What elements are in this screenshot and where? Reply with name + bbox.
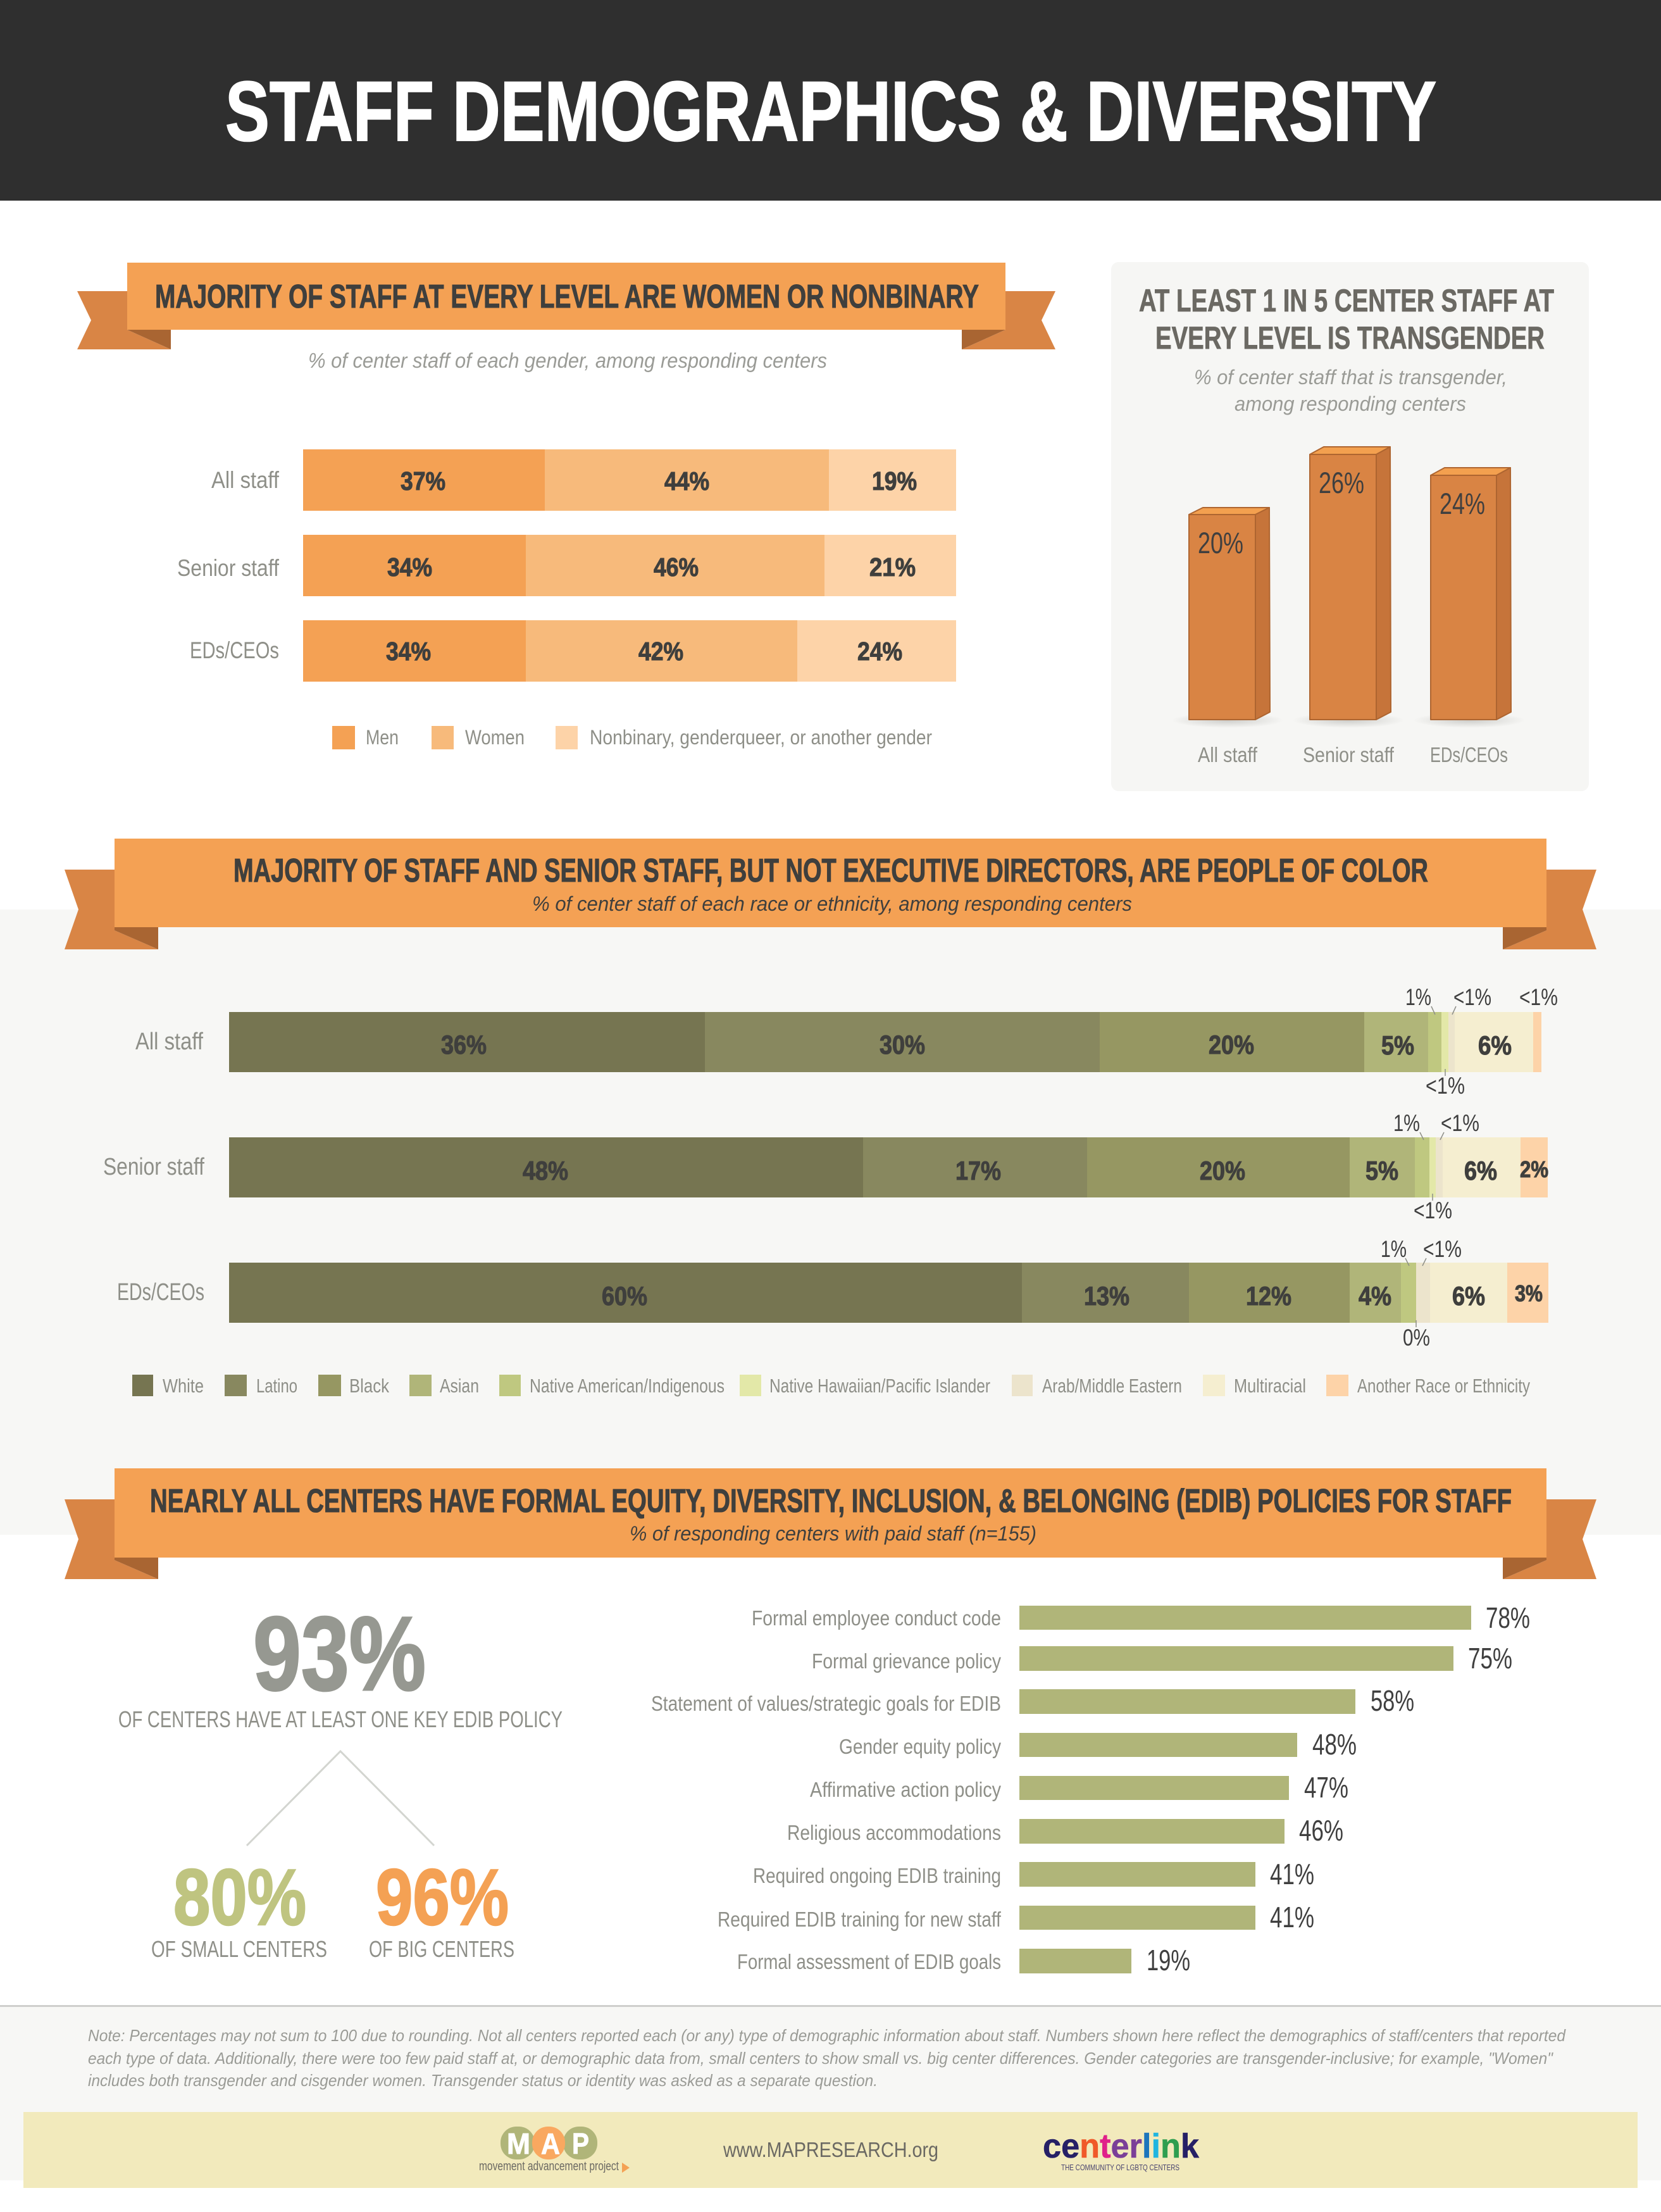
3D bar: all staff <box>1172 508 1283 766</box>
bar chart: EDIB policies: 46% <box>1299 1814 1343 1847</box>
stacked bar: EDs/CEOs race: 12% <box>1246 1281 1291 1311</box>
legend: gender: Men <box>366 726 399 749</box>
stacked bar: all staff gender: 37% <box>401 466 445 496</box>
stacked bar: EDs/CEOs race: 0% <box>1403 1325 1430 1351</box>
note text <box>88 2026 1566 2090</box>
panel: transgender <box>1111 262 1589 791</box>
stacked bar: all staff race: 20% <box>1209 1030 1254 1059</box>
stacked bar: EDs/CEOs race: EDs/CEOs <box>117 1279 204 1306</box>
stacked bar: senior staff gender: Senior staff <box>177 555 280 581</box>
background band: race section <box>0 909 1661 1535</box>
note text: Note: Percentages may not sum to 100 due to rounding. Not all centers reported each (or any) type of demographic information about staff. Numbers shown here reflect the demographics of staff/centers that reported <box>88 2026 1566 2045</box>
stat: small centers: 80% <box>173 1854 306 1942</box>
divider line above notes <box>0 2005 1661 2007</box>
stacked bar: all staff race: 30% <box>880 1030 925 1059</box>
heading: transgender: EVERY LEVEL IS TRANSGENDER <box>1155 320 1545 356</box>
legend: race: White <box>163 1375 204 1397</box>
stacked bar: EDs/CEOs race: 60% <box>602 1281 647 1311</box>
stat: small centers: OF SMALL CENTERS <box>151 1936 327 1962</box>
subtitle: gender: % of center staff of each gender, among responding centers <box>308 349 827 372</box>
bar chart: EDIB policies: Statement of values/strategic goals for EDIB <box>651 1692 1001 1715</box>
header band with title <box>0 0 1661 201</box>
branching lines <box>247 1751 434 1846</box>
stacked bar: all staff race: 1% <box>1405 984 1431 1010</box>
3D bar: EDs/CEOs: EDs/CEOs <box>1430 743 1508 766</box>
legend: race: Latino <box>256 1375 297 1397</box>
stacked bar: EDs/CEOs race: 1% <box>1381 1236 1407 1262</box>
stacked bar: all staff race: 6% <box>1478 1030 1512 1060</box>
ribbon banner: race heading <box>65 839 1596 949</box>
bar chart: EDIB policies: Required ongoing EDIB training <box>753 1864 1001 1887</box>
ribbon banner: gender heading <box>77 263 1055 349</box>
bar chart: EDIB policies: 47% <box>1304 1771 1348 1804</box>
bar chart: EDIB policies: 58% <box>1371 1684 1414 1717</box>
big stat: 93 percent: 93% <box>253 1596 426 1713</box>
bar chart: EDIB policies: 75% <box>1468 1642 1512 1675</box>
bar chart: EDIB policies: Formal assessment of EDIB goals <box>737 1950 1001 1973</box>
stacked bar: senior staff race: 48% <box>523 1156 568 1185</box>
bar chart: EDIB policies: 48% <box>1312 1728 1357 1761</box>
stacked bar: all staff race: <1% <box>1426 1073 1465 1099</box>
logo: MAP: P <box>572 2127 589 2160</box>
bar chart: EDIB policies <box>651 1601 1530 1977</box>
3D bar: senior staff: 26% <box>1319 466 1364 499</box>
bar chart: EDIB policies: 41% <box>1270 1858 1314 1890</box>
website URL: www.MAPRESEARCH.org <box>723 2138 938 2161</box>
3D bar: EDs/CEOs: 24% <box>1440 487 1485 520</box>
panel: race and ethnicity <box>65 839 1596 1397</box>
panel: EDIB policies <box>65 1468 1596 1977</box>
stacked bar: all staff gender: 19% <box>872 466 917 496</box>
stacked bar: senior staff race: Senior staff <box>103 1154 204 1180</box>
stacked bar: senior staff gender: 34% <box>387 553 432 582</box>
legend: race: Black <box>349 1375 389 1397</box>
3D bar: all staff: All staff <box>1198 743 1258 766</box>
stacked bar: EDs/CEOs race: 3% <box>1515 1280 1543 1306</box>
bar chart: EDIB policies: Formal grievance policy <box>812 1649 1001 1673</box>
stacked bar: EDs/CEOs race: 6% <box>1452 1281 1485 1311</box>
note text: each type of data. Additionally, there were too few paid staff at, or demographic data from, small centers to show small vs. big center differences. Gender categories are transgender-inclusive; for example, "Women" <box>88 2049 1554 2068</box>
stacked bar: EDs/CEOs gender: 24% <box>857 637 902 666</box>
3D bar: EDs/CEOs <box>1414 468 1525 766</box>
stacked bar: EDs/CEOs race: 4% <box>1359 1281 1391 1311</box>
stacked bar: senior staff gender: 46% <box>654 553 699 582</box>
subtitle: transgender <box>1194 366 1507 415</box>
stacked bar: senior staff race: 6% <box>1464 1156 1497 1185</box>
big stat: 93 percent: OF CENTERS HAVE AT LEAST ONE KEY EDIB POLICY <box>118 1706 563 1732</box>
logo: MAP: M <box>507 2127 530 2160</box>
logo: centerlink: centerlink <box>1043 2127 1200 2165</box>
stat: big centers: OF BIG CENTERS <box>369 1936 514 1962</box>
bar chart: EDIB policies: Required EDIB training for new staff <box>718 1908 1002 1931</box>
logo: MAP: A <box>541 2127 560 2160</box>
stacked bar: senior staff race: 5% <box>1366 1156 1398 1185</box>
stacked bar: EDs/CEOs gender: EDs/CEOs <box>190 637 279 663</box>
stacked bar: senior staff gender: 21% <box>869 553 916 582</box>
stacked bar: senior staff race: <1% <box>1441 1110 1479 1136</box>
ribbon banner: EDIB heading <box>65 1468 1596 1579</box>
bar chart: EDIB policies: 19% <box>1147 1944 1190 1977</box>
heading: transgender <box>1139 283 1554 356</box>
subtitle: transgender: % of center staff that is transgender, <box>1194 366 1507 389</box>
bar chart: EDIB policies: Religious accommodations <box>787 1821 1001 1844</box>
note text: includes both transgender and cisgender women. Transgender status or identity was asked as a separate question. <box>88 2071 878 2090</box>
stacked bar: senior staff gender <box>177 535 956 596</box>
stacked bar: senior staff race: 2% <box>1520 1156 1548 1182</box>
logo: MAP <box>479 2127 630 2173</box>
stacked bar: senior staff race <box>103 1110 1548 1223</box>
panel: gender <box>77 263 1055 749</box>
legend: gender: Women <box>465 726 525 749</box>
stacked bar: all staff gender <box>211 449 956 511</box>
stacked bar: all staff race: 5% <box>1381 1030 1414 1060</box>
stacked bar: EDs/CEOs race <box>117 1236 1548 1351</box>
stacked bar: EDs/CEOs race: 13% <box>1084 1281 1129 1311</box>
legend: race: Native American/Indigenous <box>530 1375 725 1397</box>
bar chart: EDIB policies: 41% <box>1270 1901 1314 1934</box>
stacked bar: all staff race: <1% <box>1519 984 1558 1010</box>
legend: race: Native Hawaiian/Pacific Islander <box>769 1375 990 1397</box>
3D bar: senior staff: Senior staff <box>1303 743 1395 766</box>
stacked bar: EDs/CEOs gender <box>190 620 956 682</box>
stacked bar: EDs/CEOs gender: 42% <box>638 637 683 666</box>
footer band <box>23 2112 1638 2188</box>
legend: gender: Nonbinary, genderqueer, or another gender <box>590 726 932 749</box>
ribbon banner: race heading: % of center staff of each race or ethnicity, among responding centers <box>532 892 1132 915</box>
bar chart: EDIB policies: Formal employee conduct code <box>752 1606 1001 1630</box>
stat: small centers <box>151 1854 327 1962</box>
stacked bar: EDs/CEOs gender: 34% <box>386 637 431 666</box>
stacked bar: all staff gender: All staff <box>211 467 280 493</box>
stacked bar: all staff race <box>135 984 1558 1099</box>
legend: gender <box>332 726 932 749</box>
stacked bar: all staff race: 36% <box>441 1030 487 1059</box>
legend: race: Another Race or Ethnicity <box>1357 1375 1530 1397</box>
ribbon banner: EDIB heading: % of responding centers with paid staff (n=155) <box>630 1522 1036 1545</box>
3D bar: all staff: 20% <box>1198 526 1243 559</box>
legend: race: Asian <box>440 1375 479 1397</box>
stacked bar: all staff gender: 44% <box>664 466 709 496</box>
background band: notes <box>0 2007 1661 2180</box>
stacked bar: all staff race: <1% <box>1453 984 1491 1010</box>
stat: big centers: 96% <box>376 1854 509 1942</box>
stacked bar: senior staff race: 20% <box>1200 1156 1245 1185</box>
stacked bar: senior staff race: 17% <box>955 1156 1001 1185</box>
stacked bar: senior staff race: <1% <box>1414 1197 1452 1223</box>
stacked bar: senior staff race: 1% <box>1393 1110 1420 1136</box>
stacked bar: all staff race: All staff <box>135 1028 203 1055</box>
stat: big centers <box>369 1854 514 1962</box>
bar chart: EDIB policies: Affirmative action policy <box>810 1778 1001 1801</box>
bar chart: EDIB policies: 78% <box>1486 1601 1530 1634</box>
subtitle: transgender: among responding centers <box>1235 392 1466 415</box>
logo: MAP: movement advancement project <box>479 2159 619 2173</box>
bar chart: EDIB policies: Gender equity policy <box>839 1735 1001 1758</box>
big stat: 93 percent <box>118 1596 563 1732</box>
logo: centerlink: THE COMMUNITY OF LGBTQ CENTERS <box>1061 2163 1179 2172</box>
stacked bar: EDs/CEOs race: <1% <box>1423 1236 1462 1262</box>
legend: race: Multiracial <box>1234 1375 1306 1397</box>
3D bar: senior staff <box>1293 447 1404 766</box>
ribbon banner: gender heading: MAJORITY OF STAFF AT EVERY LEVEL ARE WOMEN OR NONBINARY <box>155 278 979 315</box>
legend: race: Arab/Middle Eastern <box>1042 1375 1182 1397</box>
legend: race <box>132 1375 1530 1397</box>
